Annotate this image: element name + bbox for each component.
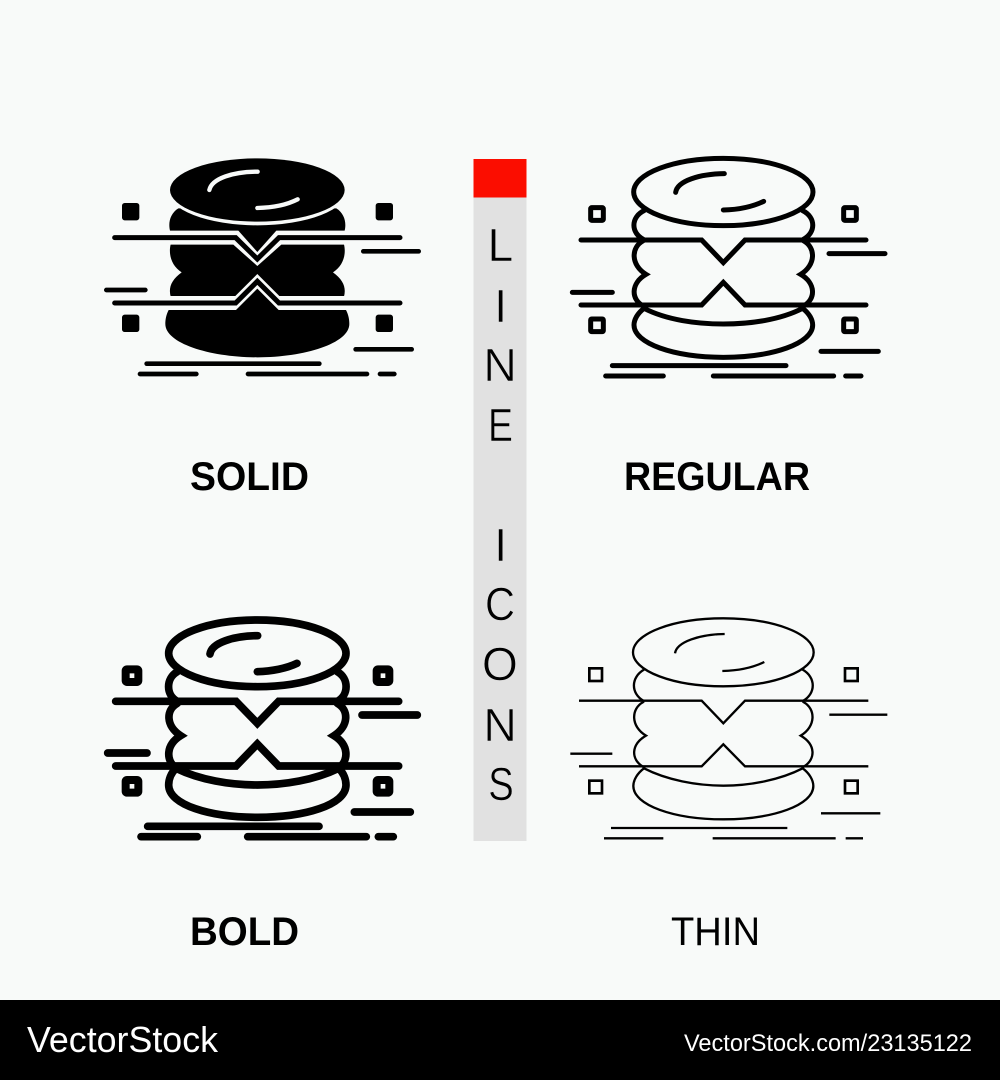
corner squares	[591, 208, 856, 332]
top disc outline gap	[167, 155, 348, 225]
label: SOLID: SOLID	[190, 455, 309, 499]
gap bands around the break lines	[157, 231, 358, 310]
footer background	[0, 1000, 1000, 1080]
speed lines	[572, 254, 885, 376]
footer bar	[0, 1000, 1000, 1080]
vertical title: LINE ICONS: I	[494, 519, 507, 571]
vertical title: LINE ICONS: L	[488, 219, 513, 271]
top disc	[634, 158, 813, 226]
disc highlights	[209, 172, 298, 208]
disc highlights	[676, 174, 764, 210]
bottom disc	[633, 768, 813, 819]
vertical title: LINE ICONS: O	[482, 638, 518, 690]
bottom disc	[169, 768, 346, 817]
corner squares	[126, 669, 389, 793]
footer image id: VectorStock.com/23135122	[684, 1030, 972, 1057]
speed lines	[106, 251, 419, 374]
bottom disc	[634, 308, 813, 357]
red cap	[474, 159, 526, 198]
label: BOLD: BOLD	[190, 910, 299, 954]
icon: thin database	[570, 618, 887, 838]
break lines	[116, 701, 399, 766]
stacked body silhouette	[165, 208, 349, 357]
break lines	[579, 701, 868, 766]
top disc	[633, 618, 814, 686]
vertical title: LINE ICONS: N	[484, 339, 517, 391]
corner squares	[122, 203, 393, 332]
vertical title: LINE ICONS: E	[488, 399, 513, 451]
vertical title: LINE ICONS: N	[484, 699, 517, 751]
center strip	[474, 159, 526, 841]
right scalloped edge	[334, 672, 346, 768]
vertical title: LINE ICONS: S	[488, 758, 514, 810]
strip background	[474, 159, 526, 841]
top disc	[169, 620, 346, 687]
icon: regular database	[572, 158, 885, 376]
right scalloped edge	[801, 211, 813, 306]
speed lines	[570, 715, 887, 838]
vertical title: LINE ICONS: I	[494, 280, 507, 332]
left scalloped edge	[169, 672, 181, 768]
right scalloped edge	[801, 670, 813, 767]
left scalloped edge	[634, 670, 646, 767]
corner squares	[589, 668, 858, 793]
vertical title: LINE ICONS	[482, 219, 518, 810]
icon: bold database	[108, 620, 417, 837]
speed lines	[108, 715, 417, 837]
left scalloped edge	[634, 211, 646, 306]
disc highlights	[210, 636, 297, 672]
top disc	[170, 158, 345, 222]
break lines	[115, 238, 400, 303]
label: THIN: THIN	[671, 910, 760, 954]
footer brand: VectorStock	[27, 1019, 219, 1060]
disc highlights	[675, 634, 764, 671]
icon: solid database	[106, 155, 419, 374]
vertical title: LINE ICONS: C	[485, 578, 515, 630]
break lines	[581, 240, 866, 305]
label: REGULAR: REGULAR	[624, 455, 810, 499]
